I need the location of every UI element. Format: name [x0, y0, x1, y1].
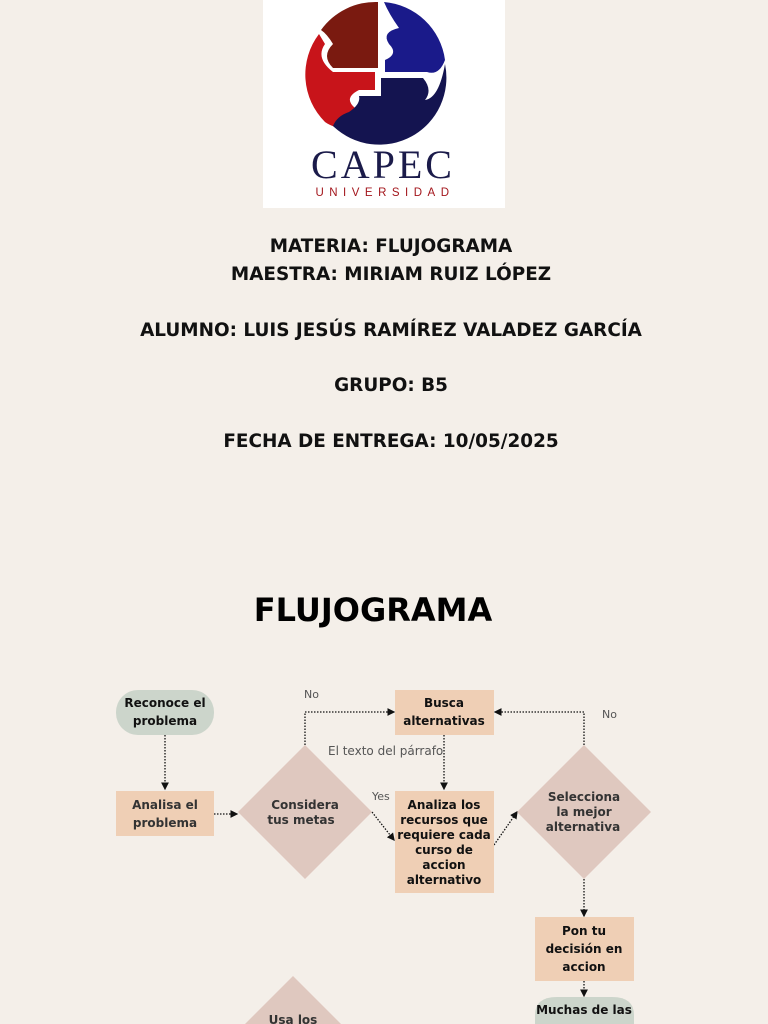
- node: usa los: [245, 976, 341, 1024]
- node: muchas: [535, 997, 634, 1024]
- node: pon tu: Pon tu: [562, 924, 606, 938]
- node: analisa: [116, 791, 214, 836]
- node: pon tu: [535, 917, 634, 981]
- node: muchas: Muchas de las: [536, 1003, 632, 1017]
- text: fecha: FECHA DE ENTREGA: 10/05/2025: [223, 431, 559, 452]
- labels: Yes: [371, 790, 390, 803]
- node: analiza: [395, 791, 494, 893]
- node: analiza: curso de: [415, 843, 473, 857]
- labels: [304, 688, 617, 803]
- text: alumno: ALUMNO: LUIS JESÚS RAMÍREZ VALADEZ GARCÍA: [140, 320, 642, 341]
- node: pon tu: decisión en: [546, 942, 622, 956]
- icon: puzzle circle: [305, 2, 446, 145]
- arrows: [165, 712, 584, 996]
- logo text: CAPEC: [311, 142, 455, 187]
- node: analisa: Analisa el: [132, 798, 198, 812]
- node: reconoce: problema: [133, 714, 197, 728]
- node: selecciona: alternativa: [546, 820, 620, 834]
- node: selecciona: Selecciona: [548, 790, 620, 804]
- labels: No: [602, 708, 617, 721]
- title: FLUJOGRAMA: [254, 591, 492, 629]
- labels: El texto del párrafo: [328, 744, 443, 758]
- node: busca: Busca: [424, 696, 464, 710]
- node: considera: tus metas: [267, 813, 335, 827]
- labels: No: [304, 688, 319, 701]
- text: materia: MATERIA: FLUJOGRAMA: [270, 236, 512, 257]
- node: analiza: recursos que: [400, 813, 488, 827]
- node: analiza: accion: [422, 858, 466, 872]
- node: selecciona: [517, 745, 651, 879]
- logo: UNIVERSIDAD: [315, 187, 455, 199]
- logo: [263, 0, 505, 208]
- node: analiza: requiere cada: [397, 828, 491, 842]
- node: selecciona: la mejor: [556, 805, 612, 819]
- node: reconoce: Reconoce el: [124, 696, 206, 710]
- node: reconoce: [116, 690, 214, 735]
- node: considera: Considera: [271, 798, 339, 812]
- node: busca: alternativas: [403, 714, 485, 728]
- node: analisa: problema: [133, 816, 197, 830]
- node: busca: [395, 690, 494, 735]
- node: considera: [238, 745, 372, 879]
- text: grupo: GRUPO: B5: [334, 375, 448, 396]
- node: analiza: alternativo: [407, 873, 481, 887]
- node: analiza: Analiza los: [408, 798, 480, 812]
- node: pon tu: accion: [562, 960, 606, 974]
- text: maestra: MAESTRA: MIRIAM RUIZ LÓPEZ: [231, 264, 551, 285]
